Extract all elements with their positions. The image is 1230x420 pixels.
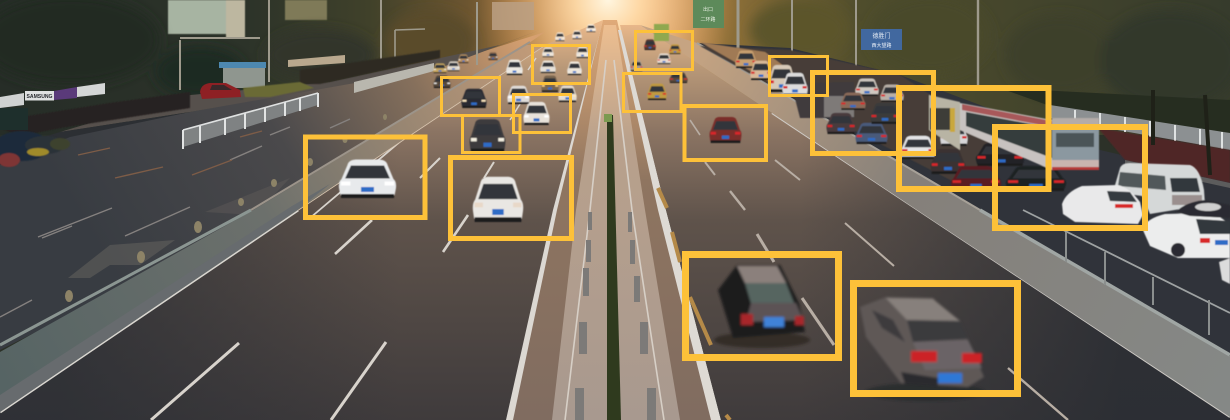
tree canopy	[0, 0, 1230, 110]
white fence	[1050, 105, 1230, 150]
cars on the main carriageway	[339, 24, 596, 222]
cars on the right carriageway	[630, 24, 742, 143]
parked bikes and flowers	[243, 82, 314, 97]
main carriageway, toward viewer	[0, 20, 604, 420]
black and white car at edge	[1176, 200, 1230, 218]
SAMSUNG sign: SAMSUNG	[26, 94, 52, 100]
detection box: black sedan	[686, 254, 838, 358]
orange lane marks	[658, 188, 730, 420]
white van	[1113, 163, 1205, 214]
buildings behind the trees	[168, 0, 327, 38]
detection box: white car far	[514, 94, 570, 132]
tree trunks	[1153, 90, 1210, 175]
detection box: dark car far	[442, 78, 500, 116]
far shelter signs	[288, 55, 345, 67]
lawn behind the fence	[1000, 88, 1230, 135]
street poles	[180, 0, 978, 90]
painted lettering on road	[68, 240, 175, 278]
detection box: white sedan, left	[306, 137, 425, 218]
sidewalk	[60, 30, 540, 132]
bike pile	[0, 131, 70, 167]
detection box: gray sedan	[854, 284, 1018, 394]
road markings	[0, 119, 350, 317]
sunset glow	[470, 0, 750, 130]
crowd of people	[0, 92, 190, 136]
green bus	[654, 24, 669, 41]
congested traffic on far-right road	[700, 42, 1099, 191]
overhead green road sign: 二环路	[700, 16, 716, 23]
median posts	[575, 212, 656, 420]
white lane dashes	[690, 120, 1068, 420]
detection boxes	[306, 32, 1145, 394]
left concrete barrier and rail	[0, 42, 545, 412]
right concrete barrier	[640, 25, 1230, 417]
right edge line	[506, 25, 604, 420]
overhead green road sign: 出口	[703, 6, 713, 13]
detection box: bus and cars	[899, 88, 1048, 189]
gray sedan, motion blurred	[860, 297, 985, 401]
blue road sign: 德胜门	[872, 32, 891, 40]
detection box: white sedan, centre	[450, 158, 572, 238]
yellow-white bus	[929, 95, 960, 150]
blue road sign	[861, 29, 902, 50]
small cars in traffic jam	[735, 51, 1066, 191]
cars on the left carriageway	[433, 52, 498, 88]
detection box: bus rear and black car	[995, 127, 1145, 228]
detection box: traffic jam behind barrier	[812, 72, 934, 154]
rail posts	[1066, 232, 1209, 335]
white sedan	[1062, 185, 1143, 224]
road curb	[1125, 160, 1230, 188]
large white and red bus	[960, 103, 1099, 170]
overhead gantry panel	[492, 2, 534, 30]
background: trees and sunset	[0, 0, 1230, 135]
partly visible car at edge	[1219, 258, 1230, 284]
parked cars on far-right road	[1062, 163, 1230, 284]
bus behind traffic	[791, 82, 854, 118]
barrier posts	[65, 114, 387, 302]
blue road sign: 西大望路	[871, 42, 892, 49]
left edge line	[0, 210, 298, 412]
blue kiosk and parked red car	[200, 62, 314, 99]
bus shelters and signs on left sidewalk	[0, 50, 440, 136]
left carriageway	[0, 30, 545, 350]
black sedan, motion blurred	[714, 265, 810, 348]
sign at left edge	[0, 93, 24, 108]
red parked bikes	[1098, 128, 1230, 183]
fence shadow	[0, 108, 28, 130]
lane dashes	[151, 58, 536, 420]
nearer fence	[183, 93, 318, 149]
right carriageway	[620, 25, 1230, 420]
detection box: red car	[684, 106, 766, 160]
crowd near far shelter	[300, 50, 440, 84]
central median	[513, 20, 721, 420]
SAMSUNG sign	[25, 91, 54, 100]
detection box: cluster of far cars, right	[636, 32, 692, 70]
overhead green road sign	[693, 0, 724, 28]
detection box: yellow taxi	[624, 74, 681, 112]
detection box: cluster of far cars, left	[532, 46, 590, 84]
farther fence	[354, 63, 434, 93]
detection box: far traffic jam	[770, 56, 828, 96]
advertising flag	[54, 87, 77, 100]
white hatchback	[1142, 213, 1230, 258]
far-right road behind the barrier	[697, 43, 1230, 353]
detection box: dark SUV	[462, 116, 520, 152]
white fence sections on left road	[183, 63, 434, 149]
white sign	[77, 83, 105, 97]
